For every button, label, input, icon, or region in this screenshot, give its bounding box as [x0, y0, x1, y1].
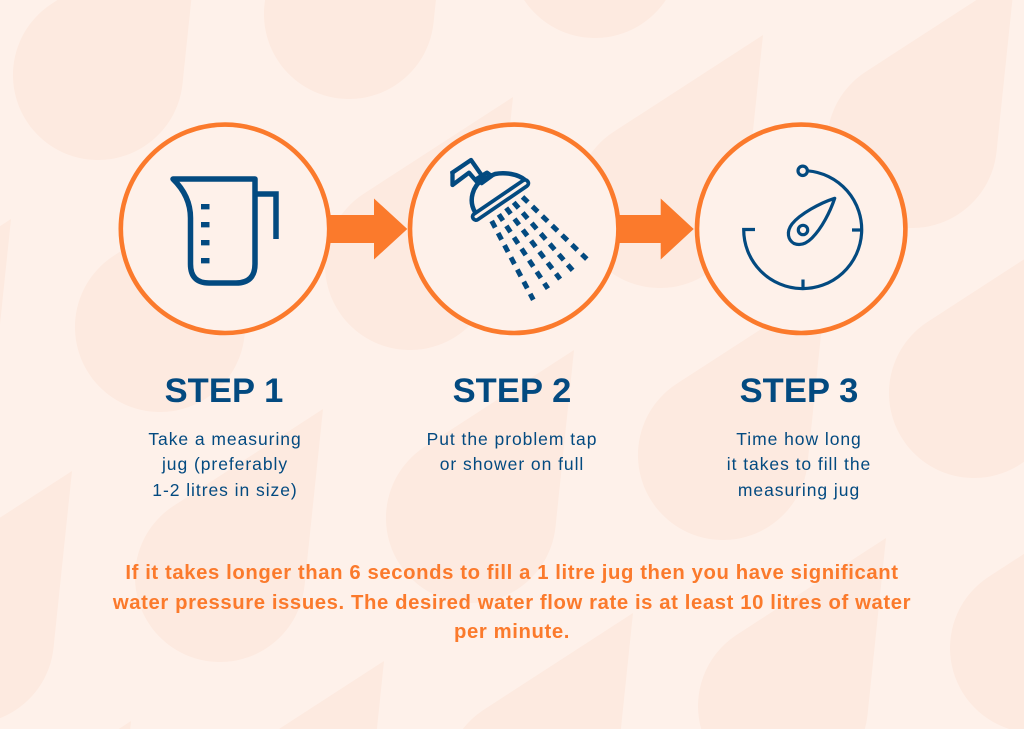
arrow: step 2 to step 3: [612, 198, 694, 260]
text: step 3: Time how long: [736, 429, 862, 449]
text: step 2: Put the problem tap: [427, 429, 597, 449]
callout: flow rate note: [112, 562, 911, 643]
callout: flow rate note: per minute.: [454, 621, 570, 643]
callout: flow rate note: If it takes longer than 6 seconds to fill a 1 litre jug then you have significant: [125, 562, 899, 584]
heading: step 1: STEP 1: [165, 372, 283, 410]
heading: step 2: STEP 2: [453, 372, 571, 410]
circle: step 2: [410, 125, 618, 333]
callout: flow rate note: water pressure issues. The desired water flow rate is at least 10 litres of water: [113, 592, 911, 614]
circle: step 3: [697, 125, 905, 333]
heading: step 3: STEP 3: [740, 372, 858, 410]
text: step 1: Take a measuring: [148, 429, 302, 449]
water spray dashes: [492, 197, 587, 300]
text: step 1: jug (preferably: [162, 454, 288, 474]
arrow: step 1 to step 2: [325, 198, 407, 260]
icon: shower head: [452, 160, 587, 300]
circle: step 1: [121, 125, 329, 333]
icon: measuring jug: [173, 179, 276, 283]
text: step 1: 1-2 litres in size): [152, 480, 298, 500]
text: step 2: or shower on full: [440, 454, 584, 474]
text: step 3: measuring jug: [738, 480, 860, 500]
text: step 3: it takes to fill the: [727, 454, 871, 474]
text: step 2: [427, 429, 597, 474]
icon: stopwatch dial: [744, 166, 862, 289]
text: step 1: [148, 429, 302, 500]
text: step 3: [727, 429, 871, 500]
